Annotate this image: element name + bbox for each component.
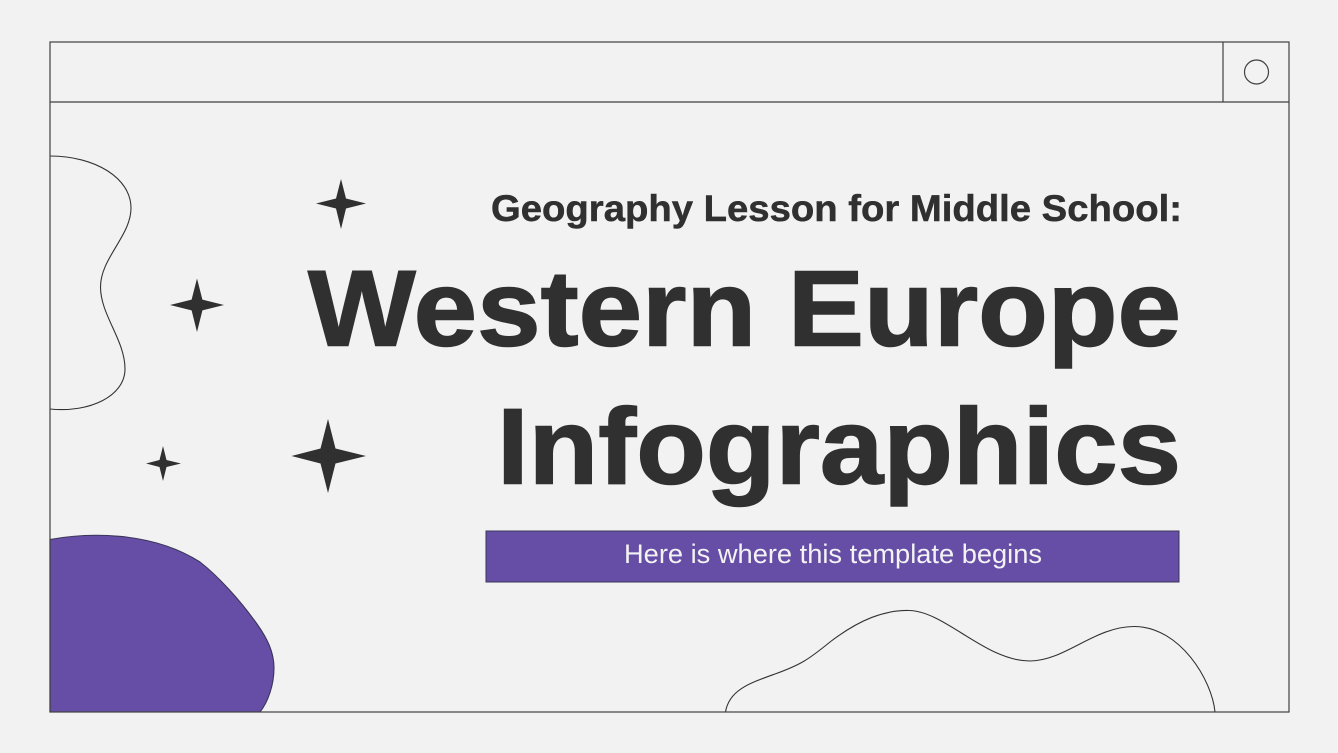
purple banner	[486, 531, 1179, 582]
banner text: Here is where this template begins	[624, 539, 1042, 569]
window control circle	[1244, 60, 1268, 84]
title line 1: Western Europe	[308, 247, 1181, 368]
sparkle 3	[146, 446, 181, 481]
sparkle 1	[316, 179, 366, 229]
bottom outline wave	[726, 610, 1215, 712]
sparkle 4	[292, 419, 366, 493]
purple blob	[50, 535, 274, 712]
sparkle icons	[146, 179, 366, 493]
subtitle heading: Geography Lesson for Middle School:	[491, 188, 1182, 229]
left outline blob	[50, 156, 131, 410]
title line 2: Infographics	[497, 386, 1181, 506]
sparkle 2	[170, 278, 224, 332]
